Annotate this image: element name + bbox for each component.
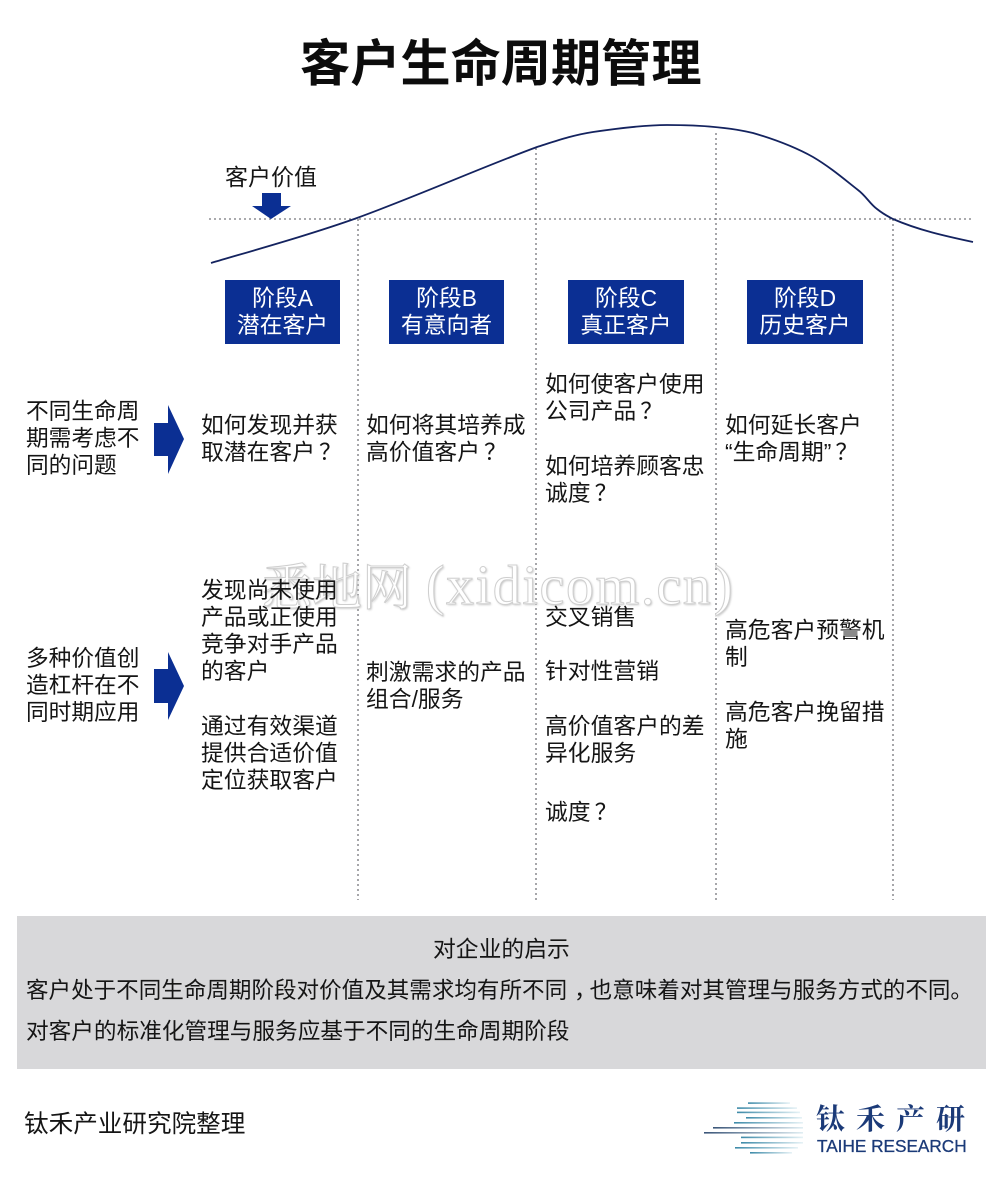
row 2 stage A levers: 的客户 <box>201 658 269 684</box>
logo Chinese name: 钛禾产研 <box>816 1104 976 1136</box>
row 1 stage B question: 如何将其培养成 <box>366 412 526 438</box>
row 2 stage A levers: 产品或正使用 <box>201 604 338 630</box>
row 2 stage C levers: 高价值客户的差 <box>545 713 705 739</box>
watermark: ( <box>426 555 445 617</box>
row 1 stage C questions: 公司产品？ <box>545 398 663 424</box>
stage A header <box>225 280 340 344</box>
row 2 stage B levers: 组合/服务 <box>366 686 464 712</box>
row 2 label <box>26 645 139 725</box>
stage D header: 阶段D <box>774 285 836 311</box>
row 1 stage C questions <box>545 371 705 506</box>
row 2 stage A levers: 通过有效渠道 <box>201 713 338 739</box>
title: 客户生命周期管理 <box>300 36 702 92</box>
row 2 stage C levers <box>545 604 705 825</box>
row 2 stage C levers: 诚度？ <box>545 799 617 825</box>
stage B header <box>389 280 504 344</box>
watermark: 悉地网 <box>262 560 412 616</box>
row 1 stage C questions: 诚度？ <box>545 480 617 506</box>
panel: implications for enterprises <box>17 916 986 1069</box>
row 2 stage B levers <box>366 659 526 712</box>
row 2 stage A levers: 发现尚未使用 <box>201 577 338 603</box>
row 2 stage A levers <box>201 577 338 793</box>
row 1 stage A question: 取潜在客户？ <box>201 439 342 465</box>
source note: 钛禾产业研究院整理 <box>24 1111 245 1138</box>
row 1 stage C questions: 如何培养顾客忠 <box>545 453 705 479</box>
row 2 stage D levers: 高危客户挽留措 <box>725 699 885 725</box>
row 1 stage B question <box>366 412 526 465</box>
stage B header: 阶段B <box>416 285 477 311</box>
icon: row 1 arrow <box>154 405 184 474</box>
logo: Taihe Research <box>704 1102 976 1156</box>
row 2 stage D levers: 高危客户预警机 <box>725 617 885 643</box>
chart: customer value curve <box>209 124 974 900</box>
row 1 stage D question: “生命周期”？ <box>725 439 858 465</box>
row 1 label <box>26 398 139 478</box>
row 1 stage A question: 如何发现并获 <box>201 412 338 438</box>
row 2 label: 同时期应用 <box>26 699 139 725</box>
row 2 stage C levers: 交叉销售 <box>545 604 636 630</box>
panel text line 1: 客户处于不同生命周期阶段对价值及其需求均有所不同 ，也意味着对其管理与服务方式的不同。 <box>26 978 973 1003</box>
stage B header: 有意向者 <box>401 312 492 338</box>
panel heading: 对企业的启示 <box>433 936 570 962</box>
row 1 label: 同的问题 <box>26 452 117 478</box>
row 2 stage D levers <box>725 617 885 752</box>
watermark <box>262 555 733 618</box>
icon: down arrow <box>252 193 291 219</box>
row 2 stage A levers: 竞争对手产品 <box>201 631 338 657</box>
stage D header <box>747 280 863 344</box>
icon: row 2 arrow <box>154 652 184 720</box>
watermark: xidicom.cn <box>446 555 712 617</box>
stage C header: 阶段C <box>595 285 657 311</box>
row 1 stage A question <box>201 412 342 465</box>
customer value label: 客户价值 <box>225 164 317 190</box>
stage D header: 历史客户 <box>759 312 851 338</box>
row 1 stage D question: 如何延长客户 <box>725 412 862 438</box>
panel text line 2: 对客户的标准化管理与服务应基于不同的生命周期阶段 <box>26 1018 569 1044</box>
curve line <box>211 125 973 263</box>
row 2 label: 造杠杆在不 <box>26 672 139 698</box>
row 1 stage B question: 高价值客户？ <box>366 439 507 465</box>
stage A header: 潜在客户 <box>237 312 328 338</box>
row 2 stage B levers: 刺激需求的产品 <box>366 659 526 685</box>
logo English name: TAIHE RESEARCH <box>817 1136 967 1156</box>
logo mark <box>704 1102 803 1154</box>
row 2 stage A levers: 提供合适价值 <box>201 740 338 766</box>
row 2 stage C levers: 针对性营销 <box>545 658 659 684</box>
row 1 stage D question <box>725 412 862 465</box>
stage C header: 真正客户 <box>580 312 672 338</box>
watermark: ) <box>714 555 733 617</box>
stage A header: 阶段A <box>252 285 313 311</box>
row 1 label: 期需考虑不 <box>26 425 139 451</box>
stage C header <box>568 280 684 344</box>
row 1 label: 不同生命周 <box>26 398 139 424</box>
row 1 stage C questions: 如何使客户使用 <box>545 371 705 397</box>
row 2 stage C levers: 异化服务 <box>545 740 636 766</box>
row 2 stage D levers: 施 <box>725 726 748 752</box>
row 2 label: 多种价值创 <box>26 645 139 671</box>
row 2 stage A levers: 定位获取客户 <box>201 767 338 793</box>
row 2 stage D levers: 制 <box>725 644 748 670</box>
